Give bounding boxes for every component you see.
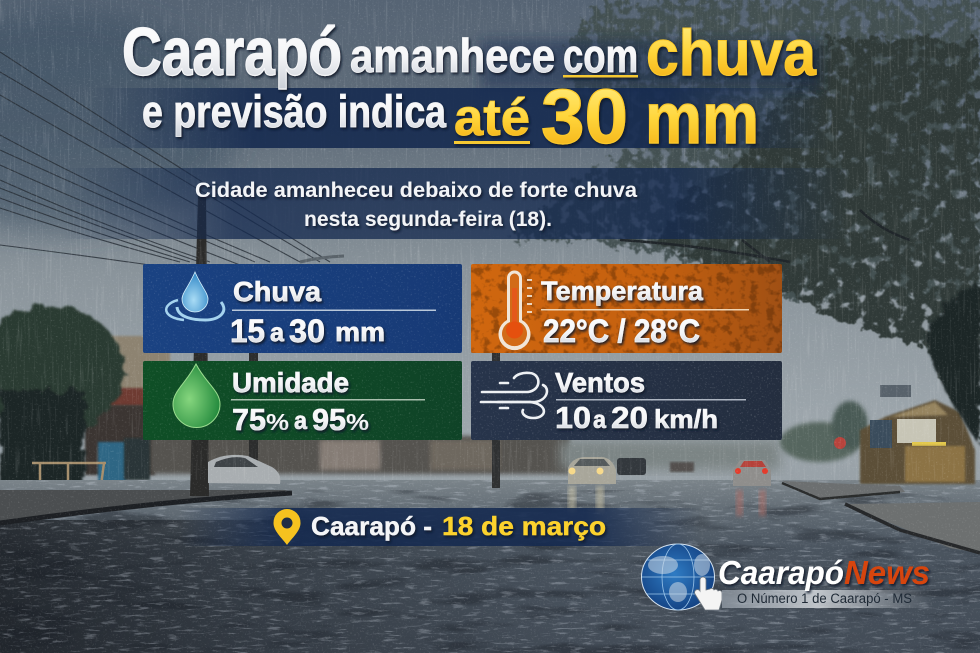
title: amanhece <box>350 29 555 82</box>
blue bin and fence <box>98 442 126 482</box>
title: 30 <box>541 74 628 160</box>
dark foreground foliage <box>925 285 980 445</box>
value: 15 a 30 mm: mm <box>335 317 385 347</box>
value: 10 a 20 km/h: 20 <box>611 400 648 435</box>
value: 10 a 20 km/h: a <box>593 406 607 434</box>
value: temperature range: 22°C / 28°C <box>543 313 700 349</box>
logo: Caarapó News: Caarapó <box>718 554 844 591</box>
title: mm <box>645 79 759 159</box>
label: Ventos: Ventos <box>555 367 645 398</box>
left tree <box>0 306 124 490</box>
street lamp <box>300 256 344 262</box>
value: 10 a 20 km/h: km/h <box>654 404 718 434</box>
icon: map pin <box>273 509 301 545</box>
value: 15 a 30 mm: a <box>270 317 285 347</box>
value: 75% a 95%: 95 <box>312 402 346 437</box>
right building <box>860 400 975 484</box>
value: 10 a 20 km/h: 10 <box>555 400 591 435</box>
subtitle <box>195 179 637 231</box>
left building <box>110 336 170 466</box>
value: 15 a 30 mm: 30 <box>289 313 325 349</box>
value: 75% a 95%: % <box>346 409 369 435</box>
right tree canopy <box>510 0 980 300</box>
value: 75% a 95%: % <box>266 409 289 435</box>
value: 15 a 30 mm: 15 <box>230 313 265 349</box>
panel: chuva <box>143 264 462 353</box>
rain overlay <box>0 0 980 480</box>
panel: ventos <box>471 361 782 440</box>
icon: green drop <box>173 364 220 427</box>
label: Umidade: Umidade <box>232 367 349 398</box>
road <box>0 480 980 653</box>
panel: temperatura <box>471 264 782 353</box>
icon: globe <box>642 544 714 610</box>
title: chuva <box>646 16 817 89</box>
location band <box>180 508 700 546</box>
far trees and street sign <box>780 422 860 462</box>
value: 10 a 20 km/h <box>555 400 718 435</box>
panel: umidade <box>143 361 462 440</box>
icon: thermometer <box>498 271 532 350</box>
title <box>122 14 817 160</box>
location: Caarapó - <box>311 511 432 541</box>
parked car <box>208 455 280 484</box>
utility poles <box>190 195 209 496</box>
subtitle: Cidade amanheceu debaixo de forte chuva <box>195 179 637 202</box>
logo: Caarapó News: News <box>844 554 930 591</box>
icon: water drop with ripple <box>166 272 224 320</box>
icon: wind <box>481 373 547 418</box>
value: 15 a 30 mm <box>230 313 385 349</box>
icon: pointing hand <box>695 577 722 610</box>
subtitle band <box>60 168 850 239</box>
left sidewalk and curb <box>0 490 292 522</box>
title: e previsão indica <box>142 86 447 137</box>
wires <box>0 52 330 265</box>
logo: Caarapó News <box>642 544 932 610</box>
title: até <box>454 89 530 147</box>
location: 18 de março <box>442 511 606 541</box>
label: Temperatura: Temperatura <box>541 276 704 306</box>
title: Caarapó <box>122 14 342 90</box>
title: com <box>563 29 638 82</box>
right sidewalks <box>782 481 905 498</box>
label: Chuva: Chuva <box>233 276 321 307</box>
subtitle: nesta segunda-feira (18). <box>304 208 552 231</box>
value: 75% a 95%: 75 <box>232 402 266 437</box>
value: 75% a 95% <box>232 402 369 437</box>
logo: Caarapó News: O Número 1 de Caarapó - MS <box>737 591 912 606</box>
title band <box>90 40 830 148</box>
road cars <box>568 457 616 484</box>
value: 75% a 95%: a <box>294 407 308 435</box>
location <box>273 509 606 545</box>
storefront row <box>150 436 570 474</box>
